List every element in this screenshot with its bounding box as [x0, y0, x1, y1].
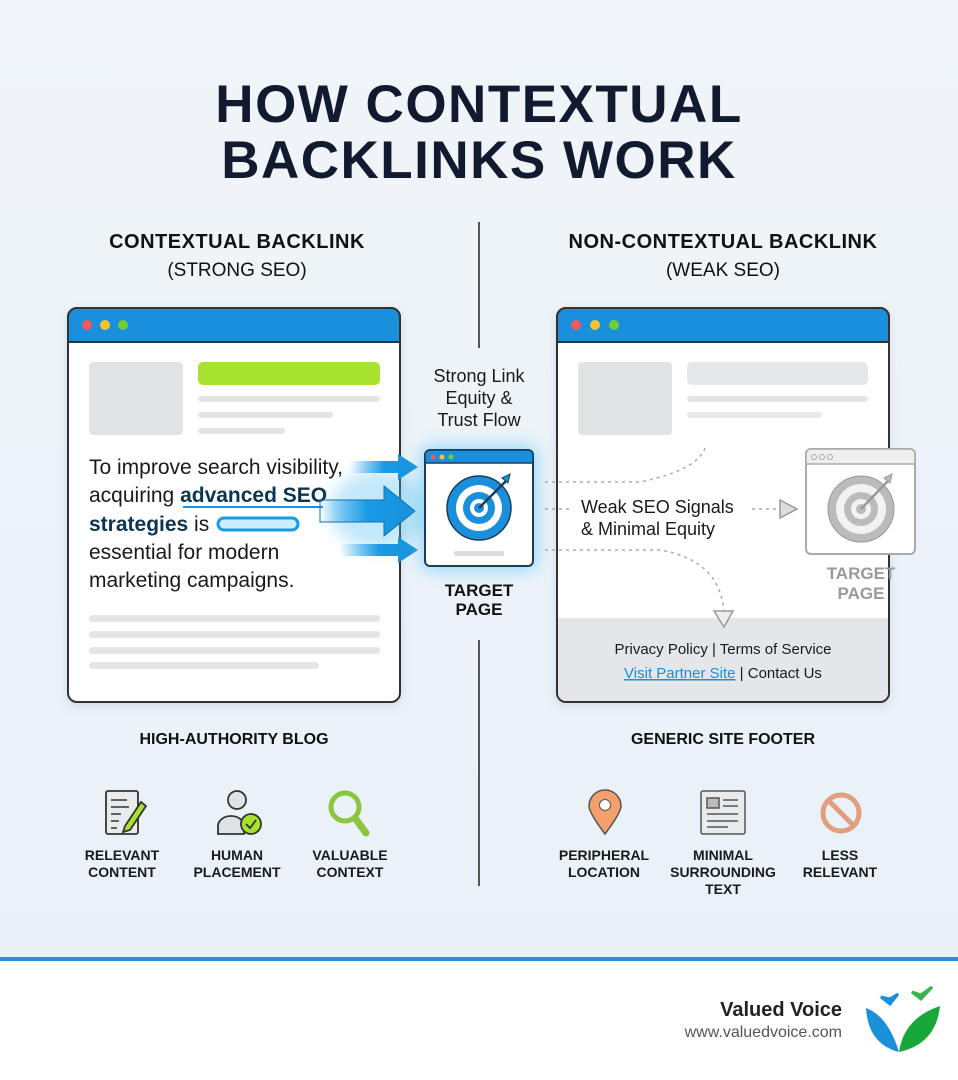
label: generic site footer: GENERIC SITE FOOTER [631, 731, 815, 748]
labels: right drawbacks: PERIPHERAL [559, 847, 650, 863]
labels: left benefits: HUMAN [211, 847, 263, 863]
labels: left benefits: RELEVANT [85, 847, 160, 863]
labels: right drawbacks: LOCATION [568, 864, 640, 880]
labels: left benefits: CONTEXT [317, 864, 384, 880]
text block: article text: marketing campaigns. [89, 569, 294, 592]
panel: high-authority blog browser [68, 308, 400, 702]
callout: strong link equity [433, 366, 526, 430]
labels: right drawbacks [559, 847, 878, 897]
arrows: strong link flow [320, 454, 430, 563]
labels: left benefits: CONTENT [88, 864, 156, 880]
icon: less relevant [823, 795, 859, 831]
label: target page: PAGE [456, 600, 502, 619]
icon: target page (strong) [420, 445, 538, 571]
label: faded target page: TARGET [827, 564, 896, 583]
footer links: Privacy Policy | Terms of Service [614, 641, 832, 658]
callout: weak seo signals: & Minimal Equity [581, 519, 715, 539]
heading: non-contextual backlink: (WEAK SEO) [666, 260, 780, 281]
brand text: Valued Voice [720, 999, 842, 1021]
label: target page: TARGET [445, 581, 514, 600]
text block: article text: essential for modern [89, 541, 279, 564]
icon: human placement [218, 791, 261, 834]
text block: article text: To improve search visibility, [89, 456, 343, 479]
icon: valuable context [331, 793, 366, 833]
heading: contextual backlink: (STRONG SEO) [167, 260, 307, 281]
labels: right drawbacks: MINIMAL [693, 847, 753, 863]
footer links [614, 641, 832, 682]
callout: strong link equity: Trust Flow [437, 410, 522, 430]
labels: left benefits: VALUABLE [312, 847, 388, 863]
icon: faded target page [806, 449, 915, 554]
text block: article text: acquiring advanced SEO [89, 484, 327, 507]
dotted weak signals [545, 445, 777, 612]
labels: right drawbacks: LESS [822, 847, 858, 863]
title: HOW CONTEXTUAL [215, 75, 743, 134]
labels: right drawbacks: TEXT [705, 881, 741, 897]
footer links: Visit Partner Site | Contact Us [624, 665, 822, 682]
icon: relevant content [106, 791, 146, 834]
label: target page [445, 581, 514, 619]
heading: non-contextual backlink [569, 231, 877, 281]
icon: peripheral location [589, 790, 621, 834]
title: BACKLINKS WORK [221, 131, 737, 190]
brand text: www.valuedvoice.com [684, 1024, 842, 1041]
heading: contextual backlink: CONTEXTUAL BACKLINK [109, 231, 365, 253]
text block: article text: strategies is [89, 513, 209, 536]
heading: non-contextual backlink: NON-CONTEXTUAL BACKLINK [569, 231, 877, 253]
labels: left benefits: PLACEMENT [193, 864, 281, 880]
icon: minimal surrounding text [701, 791, 745, 834]
heading: contextual backlink [109, 231, 365, 281]
callout: strong link equity: Equity & [445, 388, 513, 408]
title [215, 75, 743, 190]
labels: right drawbacks: RELEVANT [803, 864, 878, 880]
label: high-authority blog: HIGH-AUTHORITY BLOG [139, 731, 329, 748]
brand text [684, 999, 842, 1041]
text block: article text [89, 456, 343, 592]
callout: weak seo signals [581, 497, 734, 539]
panel: generic site browser [557, 308, 889, 702]
callout: weak seo signals: Weak SEO Signals [581, 497, 734, 517]
labels: right drawbacks: SURROUNDING [670, 864, 776, 880]
callout: strong link equity: Strong Link [433, 366, 526, 386]
labels: left benefits [85, 847, 388, 880]
label: faded target page: PAGE [838, 584, 884, 603]
label: faded target page [827, 564, 896, 603]
icon: brand logo [866, 987, 940, 1052]
